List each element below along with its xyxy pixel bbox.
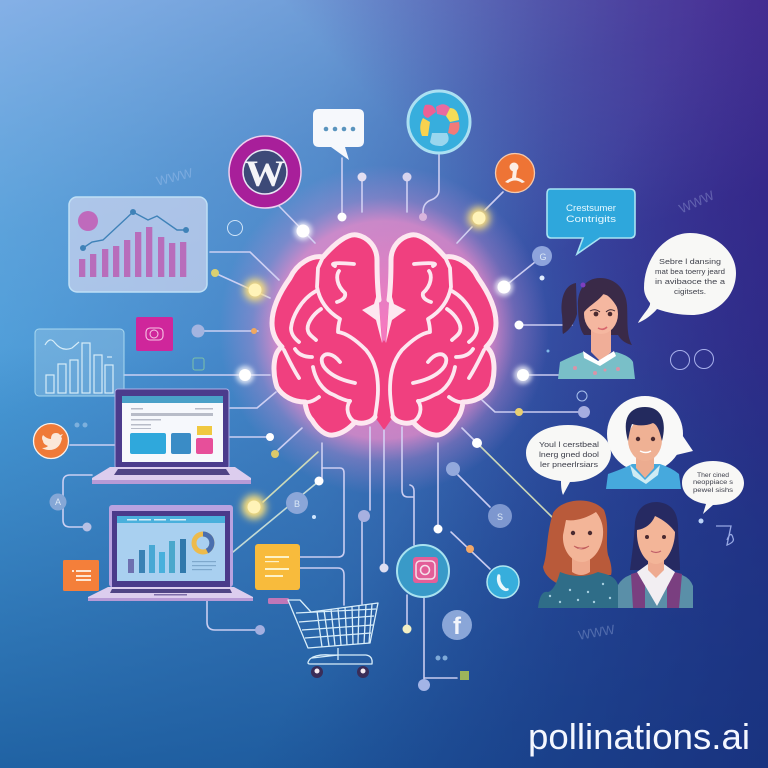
pollinations.ai watermark: pollinations.ai: [528, 716, 750, 757]
icon: chat bubble with dots: [313, 109, 364, 160]
small outlined icon letters: [55, 252, 547, 522]
speech bubble: right of man: Ther cined: [697, 472, 730, 479]
laptop: dashboard top: [92, 389, 251, 484]
faint www watermarks: [155, 165, 717, 643]
speech bubble: woman top right: [638, 233, 736, 323]
faint www watermarks: WWW: [155, 165, 195, 189]
icon: twitter badge: [34, 424, 68, 458]
icon: colourful puzzle badge: [408, 91, 470, 153]
left hemisphere: [272, 235, 384, 435]
person: woman with red hair: [538, 501, 618, 608]
panel: customer insights callout: [547, 189, 635, 254]
icon: shopping cart: [268, 598, 378, 678]
small outlined icon letters: S: [497, 512, 503, 522]
speech bubble: woman top right: in avibaoce the a: [655, 277, 725, 286]
brain: [272, 235, 496, 435]
person: woman with dark hair: [618, 502, 693, 608]
speech bubble: right of man: neoppiace s: [693, 479, 733, 486]
speech bubble: woman top right: mat bea toerry jeard: [655, 267, 725, 276]
icon: instagram badge: [397, 545, 449, 597]
icon: facebook badge: f: [453, 613, 462, 640]
glowing nodes: [50, 172, 733, 691]
laptop: analytics chart: [88, 505, 253, 601]
icon: orange list note: [63, 560, 99, 591]
speech bubble: right of man: pewel sishs: [693, 487, 733, 494]
speech bubble: woman top right: cigitsets.: [674, 287, 706, 296]
speech bubble: left of man: [526, 425, 611, 495]
speech bubble: woman top right: Sebre l dansing: [659, 257, 721, 266]
icon: orange contact badge: [496, 154, 534, 192]
small outlined icon letters: G: [539, 252, 547, 262]
person: man in speech circle: [606, 396, 693, 489]
panel: outlined bar chart: [35, 329, 124, 396]
panel: line and bar chart: [69, 197, 207, 292]
speech bubble: left of man: Youl l cerstbeal: [539, 440, 599, 449]
connector lines: [63, 154, 584, 685]
faint www watermarks: WWW: [577, 622, 617, 643]
small outlined icon letters: A: [55, 497, 61, 507]
icon: yellow note: [255, 544, 300, 590]
faint www watermarks: WWW: [677, 187, 717, 216]
speech bubble: left of man: lnerg gned dool: [539, 450, 599, 459]
right hemisphere: [384, 235, 496, 435]
icon: wordpress badge: [229, 136, 301, 208]
brain glow halo: [219, 165, 549, 495]
icon: phone badge: [487, 566, 519, 598]
panel: customer insights callout: Contrigits: [566, 214, 616, 225]
speech bubble: left of man: ler pneerlrsiars: [540, 460, 598, 469]
icon: wordpress badge: W: [245, 154, 285, 195]
icon: pink camera square: [136, 317, 173, 351]
panel: customer insights callout: Crestsumer: [566, 203, 616, 214]
person: woman with ponytail: [558, 278, 635, 379]
speech bubble: right of man: [682, 461, 744, 514]
icon: facebook badge: [442, 610, 472, 640]
small outlined icon letters: B: [294, 499, 300, 509]
